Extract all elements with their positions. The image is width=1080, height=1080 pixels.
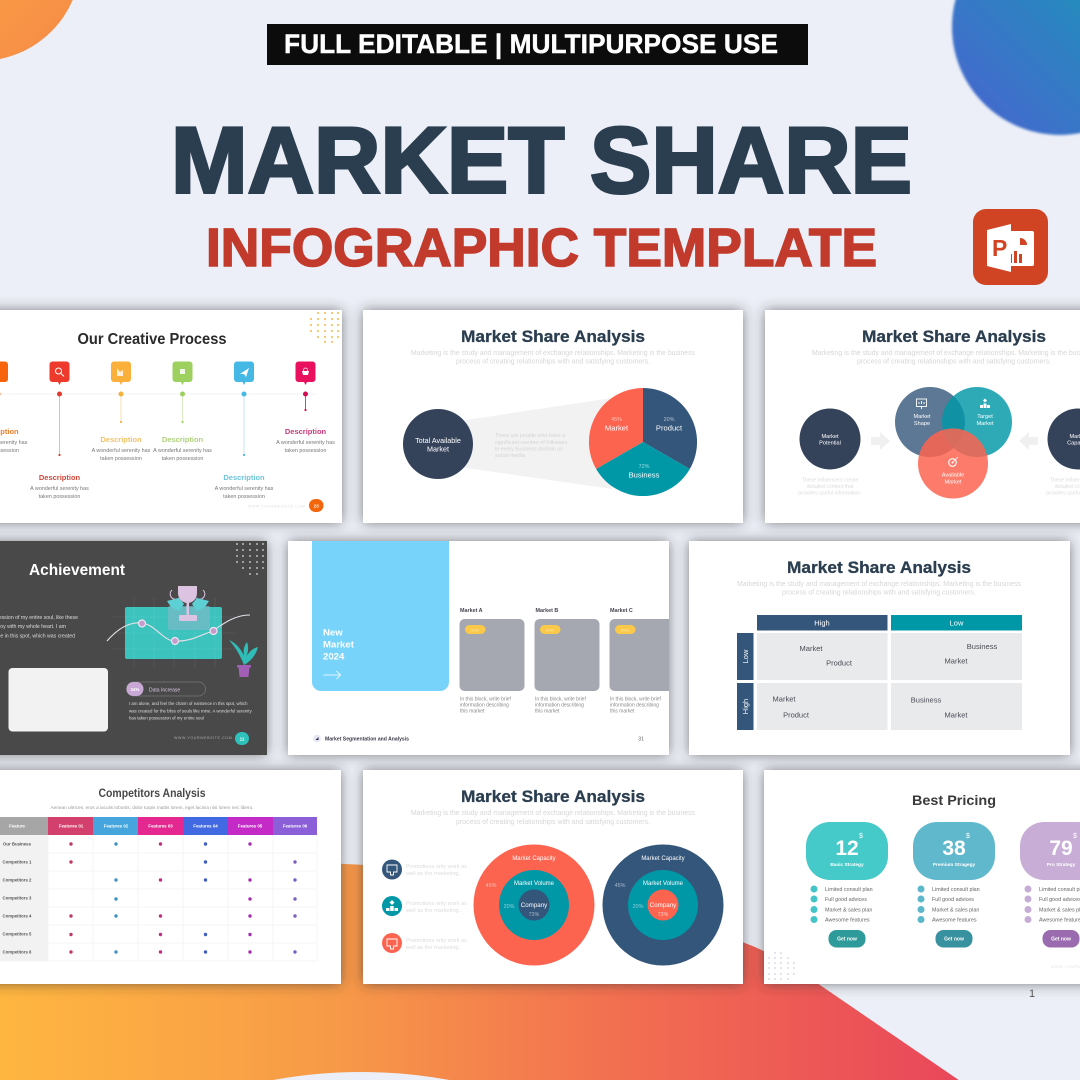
step: red: Description (39, 473, 81, 482)
concentric chart: blue: 73% (658, 912, 669, 918)
plan: basic: Get now (837, 936, 857, 942)
card: market A: this market (460, 708, 485, 714)
pie chart (589, 388, 697, 496)
market capacity circle (1048, 408, 1080, 470)
card: market A (460, 608, 524, 714)
plan: pro: Full good advices (1039, 897, 1080, 903)
card: market B: 20% (546, 628, 554, 632)
banner: full editable: FULL EDITABLE | MULTIPURPOSE USE (284, 29, 778, 59)
concentric chart: blue: Company (650, 902, 677, 909)
description: process of creating relationships with and satisfying customers. (782, 588, 976, 596)
left influencers text: provides useful information. (798, 490, 862, 496)
step: red (30, 362, 89, 500)
card: market A: Market A (460, 608, 483, 614)
panel: creative process timeline (0, 310, 342, 523)
timeline base line (0, 393, 315, 395)
data increase badge: Data Increase (149, 688, 180, 694)
label: available market: Available (942, 472, 964, 478)
concentric chart: blue: 20% (633, 904, 644, 910)
icon: market shape (916, 399, 926, 409)
heading: Market Share Analysis (461, 787, 645, 806)
step: amber: A wonderful serenity has (92, 448, 151, 454)
plan: basic: Full good advices (825, 897, 867, 903)
step: pink: taken possession (285, 448, 326, 454)
footer url: WWW.YOURWEBSITE.COM (248, 504, 305, 508)
data increase badge (126, 682, 206, 696)
heading: our creative process: Our Creative Process (78, 331, 227, 348)
page number badge (235, 732, 249, 745)
table row labels: Competitors 4 (3, 914, 32, 918)
step: green: taken possession (162, 456, 203, 462)
table header: Feature (9, 824, 25, 828)
total available market circle: Market (427, 444, 449, 454)
heading: Market Share Analysis (787, 558, 971, 577)
table row labels: Competitors 6 (3, 950, 32, 954)
step: green: A wonderful serenity has (153, 448, 212, 454)
icon: available market (949, 457, 958, 466)
venn circles (895, 387, 1012, 498)
description: process of creating relationships with and satisfying customers. (456, 817, 650, 826)
blue feature block: New (323, 628, 343, 638)
matrix: High (814, 618, 830, 628)
plan: premium (913, 822, 995, 948)
matrix: Business (967, 642, 997, 651)
funnel text: in every business domain on (495, 446, 563, 452)
pie chart: Market (605, 424, 629, 432)
illustration: potted plant (229, 640, 258, 677)
footer url: WWW.YOURWEBSITE.COM (174, 736, 232, 740)
pie chart: 72% (639, 464, 650, 470)
step: pink: Description (285, 427, 327, 436)
panel: new market (288, 541, 684, 755)
funnel text: There are people who have a (495, 433, 565, 439)
table header: Features 04 (193, 824, 218, 828)
image placeholder (8, 668, 108, 732)
panel: market concentric circles (363, 770, 743, 984)
legend item 1: Promotions only work as (406, 864, 467, 870)
subtitle: INFOGRAPHIC TEMPLATE (206, 218, 877, 278)
pie chart: 20% (664, 417, 675, 423)
plan: basic: Market & sales plan (825, 908, 872, 914)
description (411, 348, 695, 366)
left influencers text: These influencers create (802, 478, 859, 484)
card: market A: In this block, write brief (460, 696, 511, 702)
matrix: Market (945, 710, 968, 720)
plan: premium: 38 (942, 837, 966, 860)
description: Aenean ultrices, eros a iaculis lobortis, dolor turpis mattis lorem, eget lacinia nisi lorem nec libero. (50, 805, 254, 811)
blue feature block: Market (323, 640, 355, 650)
step: pink: A wonderful serenity has (276, 440, 335, 446)
matrix: High (741, 699, 750, 714)
label: market shape (913, 414, 931, 427)
step: amber: taken possession (100, 456, 142, 462)
blue feature block (312, 541, 449, 691)
concentric chart: blue: 45% (615, 883, 626, 889)
heading: Competitors Analysis (98, 788, 206, 800)
dot pattern (311, 313, 338, 342)
matrix (737, 615, 1022, 730)
panel: achievement (dark) (0, 541, 267, 755)
concentric chart: red: 73% (529, 912, 540, 918)
table row labels: Our Business (3, 842, 32, 846)
data text: I am alone, and feel the charm of existence in this spot, which (129, 701, 248, 706)
step: red: A wonderful serenity has (30, 486, 89, 492)
concentric chart: red: 20% (504, 904, 515, 910)
step: green (153, 362, 212, 462)
legend item 3 (382, 933, 467, 953)
intro text: joy with my whole heart. I am (0, 624, 66, 630)
plan: premium: Market & sales plan (932, 908, 979, 914)
table row labels: Competitors 3 (3, 896, 32, 900)
plan: pro (1020, 822, 1080, 948)
plan: premium: Premium Stragegy (933, 862, 976, 868)
matrix: Business (911, 696, 941, 704)
step: blue (215, 362, 274, 500)
description: Marketing is the study and management of exchange relationships. Marketing is the business (411, 808, 695, 817)
bottom gradient wave (0, 862, 966, 1080)
page number badge: 23 (314, 504, 319, 508)
banner: full editable (267, 24, 808, 65)
plan: premium: Limited consult plan (932, 887, 980, 893)
legend item 2: well as the marketing.. (405, 908, 462, 914)
pie chart: 45% (611, 417, 622, 423)
decorative orange corner blob (0, 0, 81, 61)
matrix: Product (826, 658, 853, 668)
matrix: Low (741, 649, 750, 663)
table header: Features 03 (148, 824, 173, 828)
footer icon (313, 735, 321, 742)
table row labels: Competitors 1 (3, 860, 32, 864)
plan: premium: Get now (944, 936, 964, 942)
icon: target market (980, 398, 990, 408)
plan: basic: Basic Strategy (830, 862, 864, 868)
plan: premium: Awesome features (932, 918, 977, 924)
card: market B: this market (535, 708, 560, 714)
label: target market: Market (976, 421, 994, 427)
page number: 31 (638, 736, 644, 742)
card: market B: information describing (535, 702, 584, 708)
legend item 1 (382, 860, 467, 880)
heading: Best Pricing (912, 792, 996, 808)
plan: basic (806, 822, 888, 948)
page number badge: 11 (240, 736, 245, 742)
card: market B: In this block, write brief (535, 696, 586, 702)
legend item 3: well as the marketing.. (405, 945, 462, 951)
dot pattern (769, 953, 794, 979)
blue feature block: 2024 (323, 652, 345, 662)
description (411, 808, 695, 826)
right influencers text (1046, 478, 1080, 496)
total available market circle (403, 409, 473, 479)
description: process of creating relationships with and satisfying customers. (456, 356, 650, 366)
panel: market matrix (689, 541, 1070, 755)
label: market shape: Market (913, 414, 931, 420)
funnel text: significant number of followers (495, 440, 568, 446)
total available market circle: Total Available (415, 436, 461, 445)
description: process of creating relationships with and satisfying customers. (857, 356, 1051, 366)
heading: Market Share Analysis (862, 327, 1046, 346)
footer label: Market Segmentation and Analysis (325, 736, 409, 742)
table row labels (0, 835, 317, 961)
arrow right (871, 432, 890, 450)
intro text: ce in this spot, which was created (0, 634, 75, 640)
step: amber (92, 362, 151, 462)
description: Marketing is the study and management of exchange relationships. Marketing is the business (411, 348, 695, 357)
label: available market (942, 472, 964, 486)
table header: Features 06 (283, 824, 308, 828)
table header: Features 02 (104, 824, 129, 828)
arrow left (1019, 432, 1038, 450)
card: market C: 20% (621, 628, 629, 632)
step: red: taken possession (39, 494, 80, 500)
plan: pro: Pro Strategy (1047, 862, 1076, 868)
pie chart: Product (656, 424, 683, 432)
step: blue: taken possession (223, 494, 265, 500)
label: market shape: Shape (914, 421, 930, 427)
data increase badge: 24% (131, 687, 139, 692)
pie chart: Business (629, 470, 660, 480)
plan: basic: Limited consult plan (825, 887, 873, 893)
step: orange (0, 362, 28, 454)
concentric chart: red (474, 844, 594, 966)
label: target market: Target (977, 414, 993, 420)
data text: was created for the bliss of souls like mine. A wonderful serenity (129, 708, 252, 714)
card: market B (534, 608, 600, 714)
plan: basic: $ (859, 833, 863, 840)
matrix: Low (950, 618, 964, 628)
market potential circle: Potential (819, 440, 841, 446)
step: amber: Description (100, 435, 142, 444)
market potential circle: Market (821, 434, 839, 440)
step: pink (276, 362, 335, 454)
plan: pro: $ (1073, 833, 1077, 840)
panel: best pricing (764, 770, 1080, 984)
card: market C: Market C (610, 608, 633, 614)
data text: has taken possession of my entire soul (129, 716, 204, 720)
decorative blue-teal circle (952, 0, 1080, 135)
card: market B: Market B (536, 608, 558, 614)
concentric chart: red: Company (521, 902, 548, 909)
plan: basic: 12 (835, 837, 859, 860)
icon: powerpoint: P (992, 235, 1007, 261)
concentric chart: blue (602, 844, 724, 966)
plan: pro: Get now (1051, 936, 1071, 942)
card: market A: information describing (460, 702, 509, 708)
panel: venn diagram (765, 310, 1080, 523)
matrix: Market (945, 656, 968, 666)
legend item 3: Promotions only work as (406, 938, 467, 944)
matrix: Market (800, 644, 823, 653)
heading: achievement: Achievement (29, 562, 125, 579)
concentric chart: red: Market Capacity (512, 856, 556, 862)
description (737, 579, 1021, 596)
bottom white arc (268, 1072, 455, 1080)
label: available market: Market (944, 480, 962, 486)
matrix: Product (783, 710, 810, 720)
page number: 1 (1029, 988, 1035, 1000)
table header: Features 01 (59, 824, 84, 828)
page number badge (309, 499, 324, 512)
plan: basic: Awesome features (825, 918, 870, 924)
icon: powerpoint (973, 209, 1048, 285)
funnel text (495, 433, 568, 459)
main title: MARKET SHARE (171, 108, 912, 212)
heading: Market Share Analysis (461, 327, 645, 346)
step: blue: A wonderful serenity has (215, 486, 274, 492)
illustration: chart with trophy (107, 586, 250, 668)
step: green: Description (162, 435, 204, 444)
funnel text: social media. (495, 453, 526, 459)
card: market A: 20% (471, 628, 479, 632)
card: market C: information describing (610, 702, 659, 708)
left influencers text (798, 478, 862, 496)
legend item 1: well as the marketing.. (405, 871, 462, 877)
concentric chart: red: 45% (486, 883, 497, 889)
left influencers text: detailed content that (807, 484, 854, 490)
concentric chart: blue: Market Capacity (641, 856, 685, 862)
card: market C: In this block, write brief (610, 696, 661, 702)
panel: market share pie (363, 310, 743, 523)
card: market C (610, 608, 669, 712)
table dots (71, 844, 295, 952)
table row labels: Competitors 5 (3, 932, 32, 936)
data text (129, 701, 252, 720)
card: market C: this market (610, 708, 635, 714)
matrix: Market (773, 694, 796, 704)
concentric chart: blue: Market Volume (643, 881, 684, 887)
legend item 2: Promotions only work as (406, 901, 467, 907)
legend item 2 (382, 896, 467, 916)
plan: premium: $ (966, 833, 970, 840)
table header: Features 05 (238, 824, 263, 828)
description (812, 348, 1080, 366)
table row labels: Competitors 2 (3, 878, 32, 882)
dot pattern (237, 544, 263, 574)
intro text (0, 615, 78, 640)
step: blue: Description (223, 473, 265, 482)
plan: pro: 79 (1049, 837, 1073, 860)
description: Marketing is the study and management of exchange relationships. Marketing is the business (737, 579, 1021, 588)
panel: competitors analysis (0, 770, 341, 984)
label: target market (976, 414, 994, 427)
concentric chart: red: Market Volume (514, 881, 555, 887)
plan: premium: Full good advices (932, 897, 974, 903)
table header (0, 817, 317, 835)
funnel shading (466, 398, 612, 489)
market potential circle (800, 408, 860, 470)
